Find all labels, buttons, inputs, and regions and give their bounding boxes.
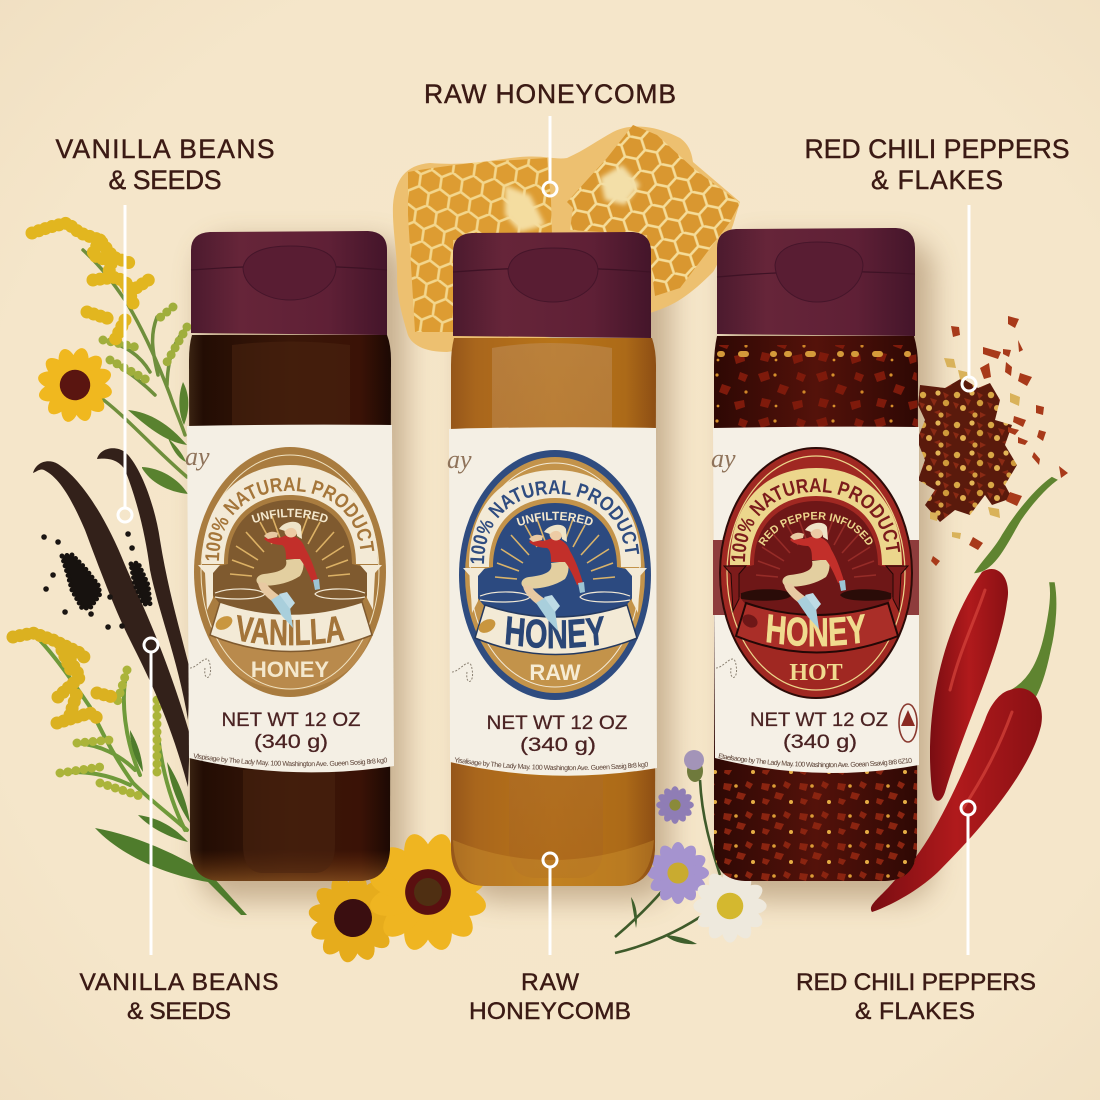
label bbox=[187, 425, 394, 772]
glass body bbox=[451, 338, 656, 886]
doodle bbox=[452, 663, 473, 681]
pin bbox=[961, 801, 975, 815]
arc subtitle: RED PEPPER INFUSED bbox=[758, 512, 873, 546]
base rim bbox=[453, 840, 654, 886]
stems bbox=[615, 780, 720, 953]
flower large bbox=[355, 819, 501, 965]
callout: vanilla top bbox=[118, 205, 132, 522]
pod two bbox=[97, 448, 190, 720]
highlight bbox=[950, 590, 985, 690]
soft shadows bbox=[200, 240, 933, 900]
left comb piece bbox=[408, 158, 552, 332]
arch band bbox=[469, 470, 641, 567]
flower small bbox=[303, 868, 403, 968]
pin bbox=[144, 638, 158, 652]
curls bbox=[480, 592, 630, 602]
sunflower: upper left bbox=[30, 340, 120, 430]
inner panel bbox=[492, 343, 612, 878]
callout: honeycomb bottom bbox=[543, 853, 557, 955]
arc subtitle: UNFILTERED bbox=[252, 508, 328, 522]
heading: honeycomb bottom: RAW bbox=[521, 969, 580, 996]
product name: HONEY bbox=[506, 616, 604, 648]
highlight bbox=[962, 712, 1012, 810]
wildflowers: asters and daisy bbox=[615, 750, 767, 953]
net weight: NET WT 12 OZ bbox=[750, 709, 888, 731]
heading: vanilla top: & SEEDS bbox=[108, 165, 222, 195]
cap tab bbox=[243, 246, 336, 300]
scattered flakes bbox=[931, 316, 1068, 566]
cap seam bbox=[453, 268, 651, 272]
daisy bbox=[693, 869, 767, 943]
ribbon bbox=[475, 605, 637, 654]
chili pepper: lower bbox=[871, 583, 1056, 912]
glass body bbox=[189, 335, 391, 881]
cap seam bbox=[717, 272, 915, 277]
cap tab bbox=[508, 248, 598, 302]
pod one bbox=[33, 461, 190, 787]
product name: HONEY bbox=[766, 614, 865, 646]
sun rays bbox=[495, 519, 615, 579]
product name: VANILLA bbox=[237, 614, 345, 646]
lower flakes bbox=[714, 770, 917, 881]
badge bbox=[194, 447, 386, 697]
heading: honeycomb bottom bbox=[469, 969, 631, 1025]
curls bbox=[215, 589, 365, 599]
badge base bbox=[194, 447, 386, 697]
cap bbox=[453, 232, 651, 338]
left comb wax patch bbox=[505, 185, 545, 232]
stems bbox=[83, 250, 187, 477]
leader line bbox=[124, 205, 126, 508]
seed line bbox=[720, 351, 910, 357]
heading: vanilla top bbox=[56, 134, 274, 195]
flowers: bottom centre bbox=[303, 819, 501, 968]
glass body bbox=[714, 336, 918, 881]
arch band bbox=[730, 468, 902, 565]
vanilla seeds bbox=[44, 534, 150, 627]
pod bbox=[930, 569, 1008, 801]
leader line bbox=[548, 867, 552, 955]
net weight: NET WT 12 OZ bbox=[222, 709, 361, 731]
ribbon bbox=[736, 603, 898, 652]
heading: chili bottom: RED CHILI PEPPERS bbox=[796, 969, 1036, 996]
stems bbox=[33, 633, 187, 830]
chili pepper: upper bbox=[930, 478, 1056, 801]
sun rays bbox=[230, 516, 350, 576]
label bbox=[713, 427, 919, 773]
pin bbox=[543, 853, 557, 867]
pin-up figure bbox=[257, 522, 320, 628]
bottle: vanilla honey bbox=[185, 231, 394, 881]
scattered seeds bbox=[930, 358, 1020, 539]
pin-up figure bbox=[783, 523, 846, 629]
yellow blossoms bbox=[13, 633, 113, 723]
gram weight: (340 g) bbox=[783, 731, 857, 753]
right comb piece bbox=[567, 125, 740, 296]
pin bbox=[962, 377, 976, 391]
bottle: raw honey bbox=[447, 232, 657, 886]
badge bbox=[459, 450, 651, 700]
heading: honeycomb bottom: HONEYCOMB bbox=[469, 998, 631, 1025]
pin-up figure bbox=[522, 525, 585, 631]
fine print: Etaelsaoge by The Lady May. 100 Washington Ave. Goean Ssavig 8r8 6Z10 bbox=[718, 753, 912, 769]
inner panel bbox=[232, 342, 350, 873]
heading: honeycomb top: RAW HONEYCOMB bbox=[424, 79, 676, 109]
doodle bbox=[190, 659, 211, 677]
arc text: 100% NATURAL PRODUCT bbox=[731, 478, 900, 562]
thin ring bbox=[470, 463, 640, 687]
round stamp bbox=[899, 704, 917, 742]
stem bbox=[976, 478, 1056, 572]
chili flakes bbox=[917, 316, 1068, 566]
badge base bbox=[720, 448, 912, 698]
dome bbox=[736, 501, 896, 616]
pod bbox=[871, 688, 1042, 912]
right comb wax patch bbox=[600, 165, 640, 205]
flake pile bbox=[917, 378, 1017, 522]
heading: vanilla top: VANILLA BEANS bbox=[56, 134, 274, 164]
gold inner bbox=[465, 457, 645, 693]
thin ring bbox=[727, 456, 905, 690]
aster bud bbox=[684, 750, 704, 782]
ribbon bbox=[210, 602, 372, 652]
ribbon tails bbox=[724, 566, 908, 611]
leader line bbox=[150, 652, 152, 955]
net weight: NET WT 12 OZ bbox=[486, 712, 628, 734]
amber glow bbox=[190, 770, 390, 881]
goldenrod sprig: lower left bbox=[13, 633, 247, 915]
doodle bbox=[716, 659, 737, 677]
leaves bbox=[128, 382, 188, 494]
cap tab bbox=[775, 242, 863, 302]
leader line bbox=[966, 815, 970, 955]
yellow blossoms bbox=[32, 223, 153, 340]
badge bbox=[719, 447, 913, 699]
aster small bbox=[656, 786, 694, 824]
bottle: hot honey bbox=[711, 228, 919, 881]
variety name: HOT bbox=[789, 660, 843, 686]
heading: vanilla bottom bbox=[80, 969, 278, 1025]
honeycomb bbox=[393, 125, 740, 352]
ribbon tails bbox=[198, 565, 382, 610]
stem bbox=[1012, 583, 1056, 702]
thin ring bbox=[201, 455, 379, 689]
arc text: 100% NATURAL PRODUCT bbox=[470, 480, 640, 564]
cap bbox=[717, 228, 915, 336]
fine print: Yisalisage by The Lady May. 100 Washington Ave. Gueen Sasig 8r8 kg0 bbox=[454, 757, 648, 772]
pin bbox=[118, 508, 132, 522]
fine print: Vlspisage by The Lady May. 100 Washington Ave. Gueen Sosig 8r8 kg0 bbox=[194, 753, 387, 768]
script mark: ay bbox=[447, 445, 472, 474]
bee icon bbox=[476, 616, 498, 636]
cap bbox=[191, 231, 387, 335]
gram weight: (340 g) bbox=[254, 731, 328, 753]
variety name: RAW bbox=[529, 660, 581, 685]
callout: honeycomb top bbox=[543, 116, 557, 196]
ribbon tails bbox=[463, 568, 647, 613]
cap seam bbox=[191, 266, 387, 270]
sun rays bbox=[756, 517, 876, 577]
arc text: 100% NATURAL PRODUCT bbox=[205, 477, 374, 561]
callout: chili top bbox=[962, 205, 976, 391]
dome bbox=[210, 500, 370, 615]
arc subtitle: UNFILTERED bbox=[516, 512, 593, 526]
callout: vanilla bottom bbox=[144, 638, 158, 955]
pepper icon bbox=[740, 612, 760, 630]
green buds bbox=[103, 307, 187, 380]
green buds bbox=[60, 670, 157, 797]
curls bbox=[741, 590, 891, 600]
badge base bbox=[459, 450, 651, 700]
heading: chili top: & FLAKES bbox=[871, 165, 1003, 195]
leaves bbox=[95, 730, 247, 915]
heading: vanilla bottom: VANILLA BEANS bbox=[80, 969, 278, 996]
heading: chili bottom: & FLAKES bbox=[855, 998, 975, 1025]
heading: chili bottom bbox=[796, 969, 1036, 1025]
aster large bbox=[647, 842, 709, 904]
heading: vanilla bottom: & SEEDS bbox=[127, 998, 231, 1025]
honey syrup pool bbox=[393, 126, 740, 352]
leader line bbox=[548, 116, 552, 182]
dome bbox=[475, 503, 635, 618]
scattered seeds bbox=[44, 534, 132, 627]
leader line bbox=[968, 205, 970, 377]
heading: chili top: RED CHILI PEPPERS bbox=[804, 134, 1070, 164]
pin bbox=[543, 182, 557, 196]
label band bbox=[713, 540, 919, 615]
heading: chili top bbox=[804, 134, 1070, 195]
label bbox=[449, 427, 657, 776]
lower tint bbox=[210, 636, 370, 690]
gram weight: (340 g) bbox=[520, 734, 596, 756]
seed pile left bbox=[62, 555, 100, 608]
leaf bbox=[631, 897, 697, 944]
seed pile right bbox=[131, 563, 150, 604]
goldenrod sprig: upper left bbox=[32, 223, 188, 494]
callout: chili bottom bbox=[961, 801, 975, 955]
script mark: ay bbox=[185, 442, 210, 471]
arch band bbox=[202, 465, 378, 564]
upper flakes bbox=[714, 345, 918, 430]
variety name: HONEY bbox=[251, 657, 329, 682]
bee icon bbox=[213, 613, 235, 633]
vanilla pods bbox=[33, 448, 190, 787]
script mark: ay bbox=[711, 444, 736, 473]
